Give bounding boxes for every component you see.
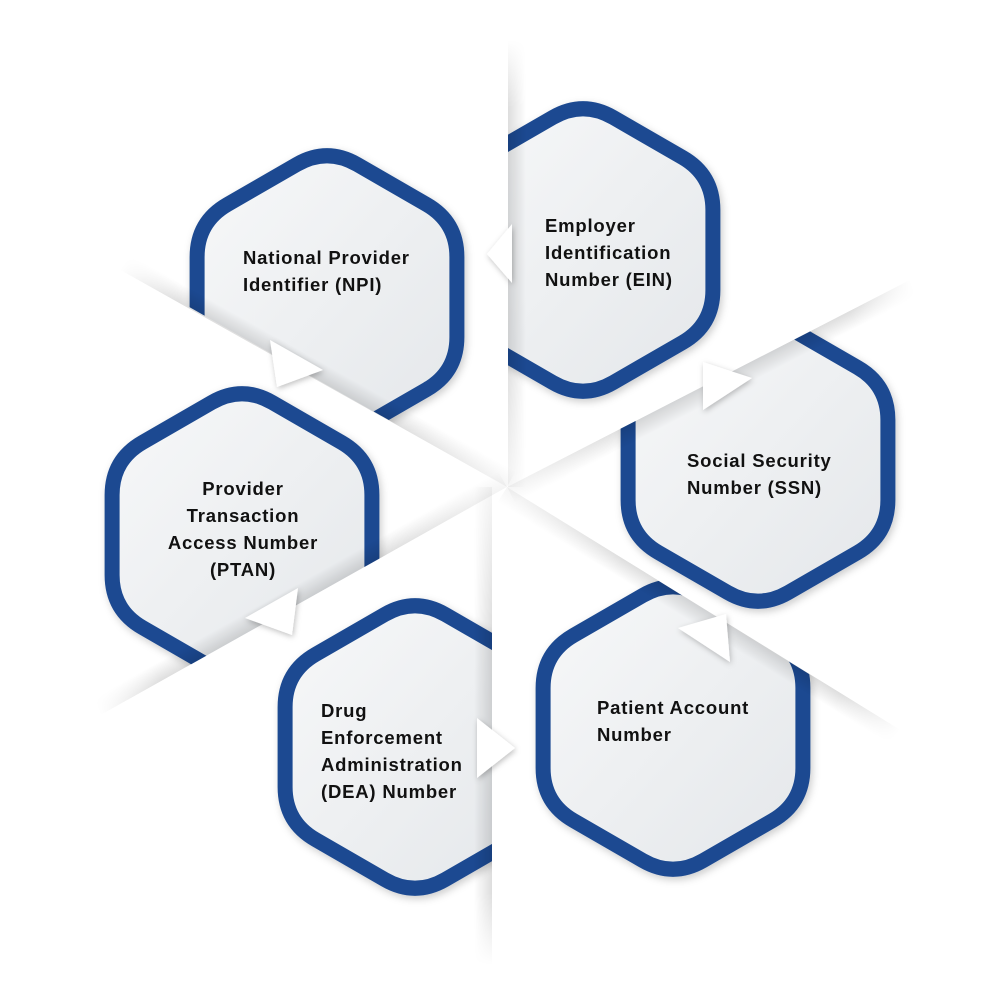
hexagon: Patient Account (543, 587, 803, 869)
text: NPI: Identifier (NPI) (243, 274, 382, 295)
text: EIN: Number (EIN) (545, 269, 673, 290)
text: Patient Account: Number (597, 724, 672, 745)
text: DEA: Enforcement (321, 727, 443, 748)
arrows (245, 224, 752, 778)
hexagon: NPI (197, 156, 457, 438)
text: Patient Account: Patient Account (597, 697, 749, 718)
hexagon: PTAN (112, 394, 372, 676)
text: PTAN: (PTAN) (210, 559, 276, 580)
hexagon: EIN (453, 109, 713, 391)
hexagon: DEA (276, 598, 492, 902)
text: DEA: Administration (321, 754, 463, 775)
text: PTAN: Transaction (187, 505, 299, 526)
text: PTAN: Access Number (168, 532, 318, 553)
text: EIN: Employer (545, 215, 636, 236)
text: EIN: Identification (545, 242, 671, 263)
text: SSN: Number (SSN) (687, 477, 822, 498)
text: SSN: Social Security (687, 450, 832, 471)
text: PTAN: Provider (202, 478, 284, 499)
hexagon: SSN (628, 319, 888, 601)
text: DEA: (DEA) Number (321, 781, 457, 802)
fold shadows (92, 40, 918, 965)
text: DEA: Drug (321, 700, 367, 721)
text: NPI: National Provider (243, 247, 410, 268)
